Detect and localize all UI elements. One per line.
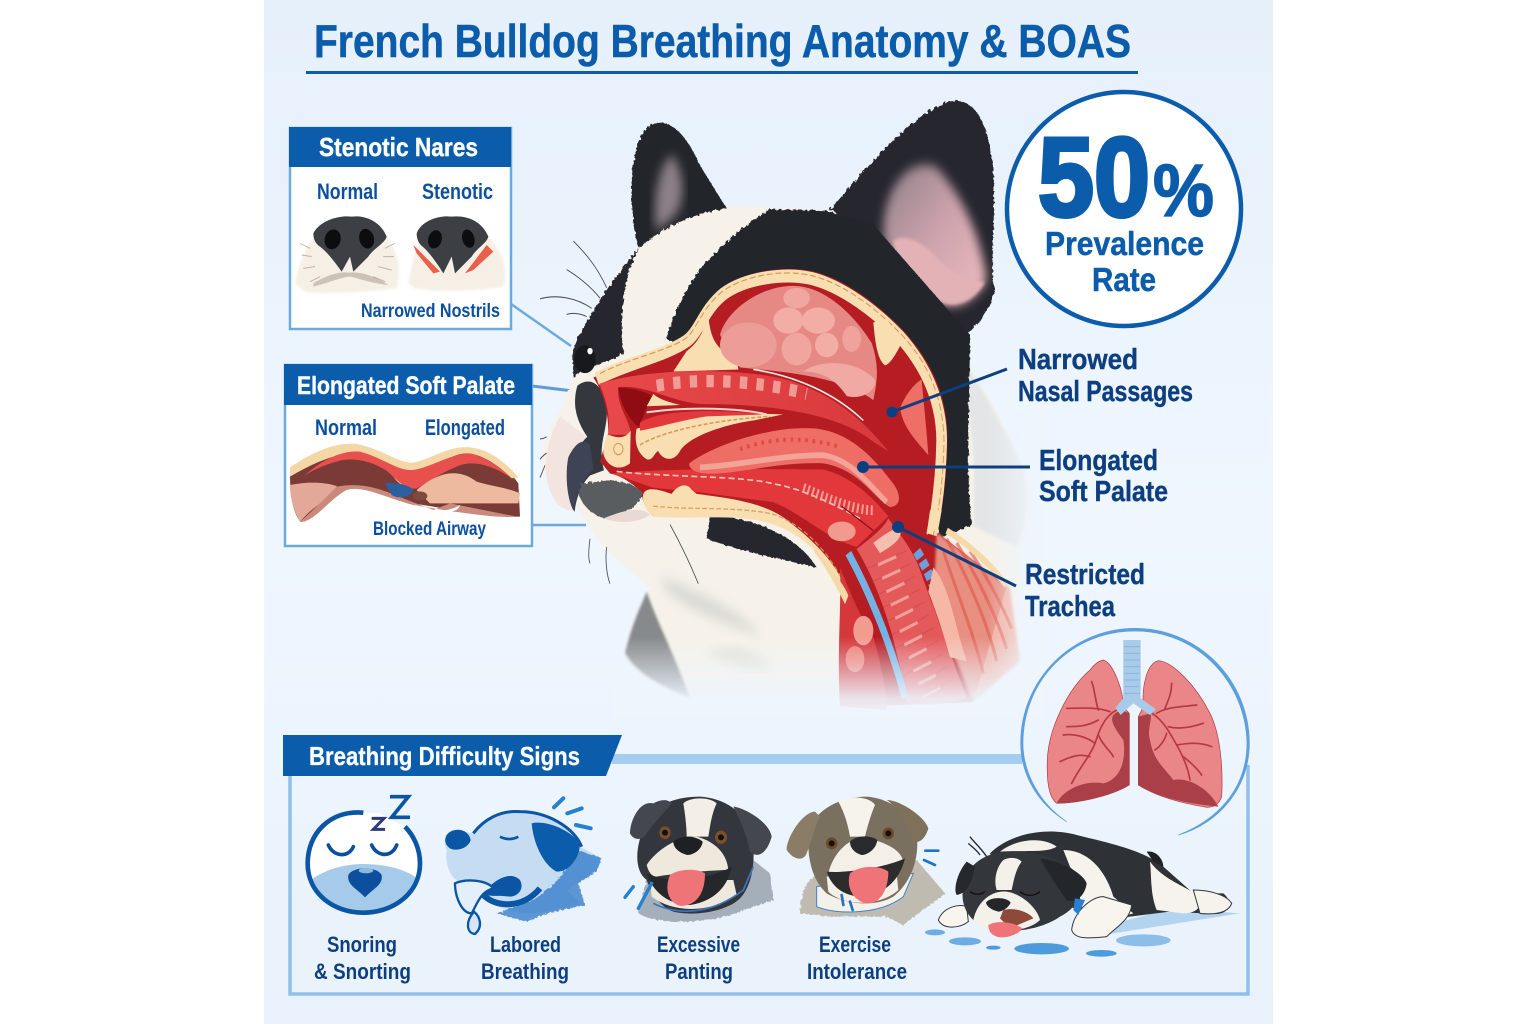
illustration: french bulldog head cross-section: [540, 101, 1043, 718]
body: [990, 831, 1229, 920]
text: excessive panting: [657, 932, 740, 984]
airway branches: [1060, 682, 1212, 783]
heading: breathing difficulty signs: Breathing Difficulty Signs: [309, 741, 580, 771]
left lung: [1047, 660, 1129, 803]
text: snoring and snorting: & Snorting: [314, 959, 411, 984]
black around eye: [573, 248, 639, 378]
left ear: [631, 123, 727, 253]
text: narrowed nostrils: Narrowed Nostrils: [361, 301, 500, 322]
snout and nose: [546, 382, 650, 522]
water puddles: [925, 910, 1240, 957]
text: snoring and snorting: [314, 932, 411, 984]
heading: elongated soft palate: Elongated Soft Palate: [297, 372, 515, 400]
callout: restricted trachea pointer: [892, 521, 1016, 586]
callout: 50% prevalence rate: %: [1153, 149, 1214, 232]
blue vessels: [848, 551, 937, 698]
anatomical section: deep red base: [593, 269, 1007, 706]
black jaw patch: [707, 514, 817, 567]
text: exercise intolerance: Exercise: [819, 932, 891, 957]
heading: stenotic nares: Stenotic Nares: [319, 132, 478, 162]
icon: stenotic nose: [408, 216, 505, 291]
callout: elongated soft palate pointer: [857, 461, 1030, 473]
callout: narrowed nasal passages pointer: [886, 369, 1007, 418]
black head patch: [667, 209, 972, 539]
labels normal and stenotic: Stenotic: [422, 179, 493, 204]
heading: stenotic nares: [289, 127, 511, 167]
sign: resting dog: [925, 831, 1240, 957]
callout: 50% prevalence rate: Rate: [1092, 261, 1156, 298]
sign: exercise intolerance dog: [787, 797, 945, 925]
text: labored breathing: [481, 932, 569, 984]
pale muscle fibres right of trachea: [933, 531, 1020, 702]
label: elongated soft palate: Elongated: [1039, 445, 1158, 477]
neck fur shading: [625, 343, 1027, 698]
label: elongated soft palate: [1039, 445, 1168, 508]
text: labored breathing: Labored: [490, 932, 561, 957]
callout: 50% prevalence rate: Prevalence: [1045, 225, 1204, 262]
trachea tube: [1115, 640, 1156, 715]
fur fade at right: [987, 408, 1043, 718]
inner throat membrane: [900, 380, 928, 455]
label: narrowed nasal passages: Narrowed: [1018, 344, 1138, 376]
neck tissue and glands: [813, 549, 967, 710]
head: [963, 852, 1081, 931]
panel: elongated soft palate: [284, 364, 532, 546]
eye: [574, 345, 596, 373]
background panel: [264, 0, 1273, 1024]
labels normal and elongated: [315, 415, 505, 440]
brain tissue: [720, 286, 877, 400]
circular frame: [1021, 628, 1249, 835]
right lung: [1138, 661, 1222, 807]
callout: 50% prevalence rate: 50: [1038, 115, 1150, 240]
icon: normal nose: [295, 216, 399, 293]
whiskers: [540, 241, 698, 584]
nasal passage upper tube: [599, 369, 888, 451]
labels normal and elongated: Elongated: [425, 415, 505, 440]
sign: excessive panting dog: [625, 797, 773, 922]
text: excessive panting: Panting: [665, 959, 733, 984]
text: snoring and snorting: Snoring: [327, 932, 397, 957]
trachea: [857, 518, 967, 705]
label: restricted trachea: Restricted: [1025, 559, 1145, 591]
sign: labored breathing icon: [445, 798, 602, 934]
right ear: [823, 101, 995, 347]
labels normal and elongated: Normal: [315, 415, 377, 440]
title: French Bulldog Breathing Anatomy & BOAS: [314, 15, 1131, 67]
lungs inset: [1021, 628, 1249, 835]
label: restricted trachea: Trachea: [1025, 591, 1116, 623]
text: labored breathing: Breathing: [481, 959, 569, 984]
text: excessive panting: Excessive: [657, 932, 740, 957]
palate diagram: [290, 444, 520, 522]
head fur silhouette: [543, 206, 1031, 706]
panel: breathing difficulty signs frame: [290, 759, 1248, 994]
label: elongated soft palate: Soft Palate: [1039, 476, 1168, 508]
lower throat tissue: [612, 469, 888, 547]
label: narrowed nasal passages: [1018, 344, 1193, 408]
labels normal and stenotic: Normal: [317, 179, 378, 204]
lower jaw bone: [643, 485, 848, 596]
heading: breathing difficulty signs: [283, 735, 622, 776]
text: exercise intolerance: [807, 932, 907, 984]
cream skull bone: [597, 273, 944, 535]
text: exercise intolerance: Intolerance: [807, 959, 907, 984]
connector lines from boxes to dog: [511, 146, 632, 525]
text: blocked airway: Blocked Airway: [373, 519, 486, 540]
fade at bottom of neck: [613, 637, 1043, 718]
sign: snoring icon: [308, 797, 420, 913]
panel: stenotic nares: [289, 127, 511, 329]
palate cream bones: [603, 394, 783, 468]
callout: 50% prevalence rate: [1007, 92, 1241, 326]
heading: elongated soft palate: [284, 364, 532, 405]
soft palate elongated tissue: [689, 428, 899, 507]
labels normal and stenotic: [317, 179, 493, 204]
front paws: [938, 905, 968, 927]
label: narrowed nasal passages: Nasal Passages: [1018, 376, 1193, 408]
label: restricted trachea: [1025, 559, 1145, 623]
